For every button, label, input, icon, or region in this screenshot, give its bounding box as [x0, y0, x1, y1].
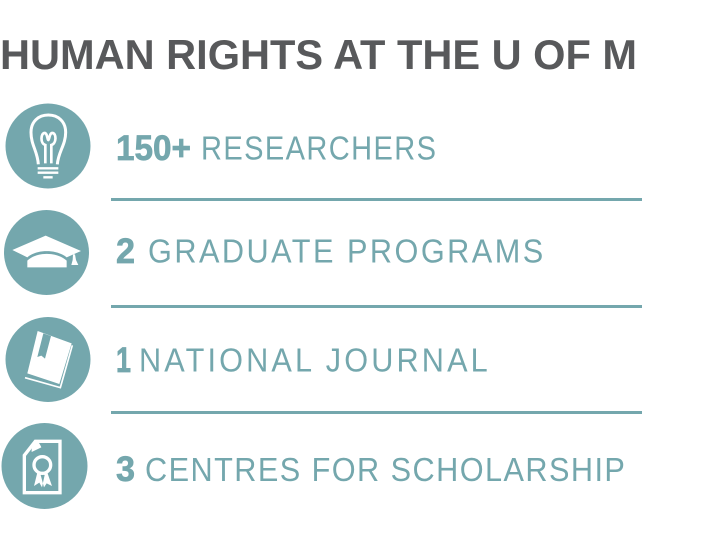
icon: light bulb [6, 104, 90, 188]
title: HUMAN RIGHTS AT THE U OF M [0, 31, 637, 78]
stat: centres for scholarship: 3 [116, 450, 135, 489]
stat: national journal: NATIONAL JOURNAL [139, 341, 488, 379]
stat: centres for scholarship: CENTRES FOR SCHOLARSHIP [145, 451, 625, 488]
icon: graduation cap [4, 210, 89, 295]
stat: researchers: RESEARCHERS [201, 130, 436, 167]
stat: researchers [116, 129, 436, 168]
stat: graduate programs: GRADUATE PROGRAMS [148, 232, 543, 270]
stat: researchers: 150+ [116, 129, 191, 168]
icon: book [6, 317, 90, 402]
stat: national journal: 1 [116, 341, 131, 380]
stat: graduate programs: 2 [116, 232, 135, 271]
icon: certificate [2, 423, 88, 509]
